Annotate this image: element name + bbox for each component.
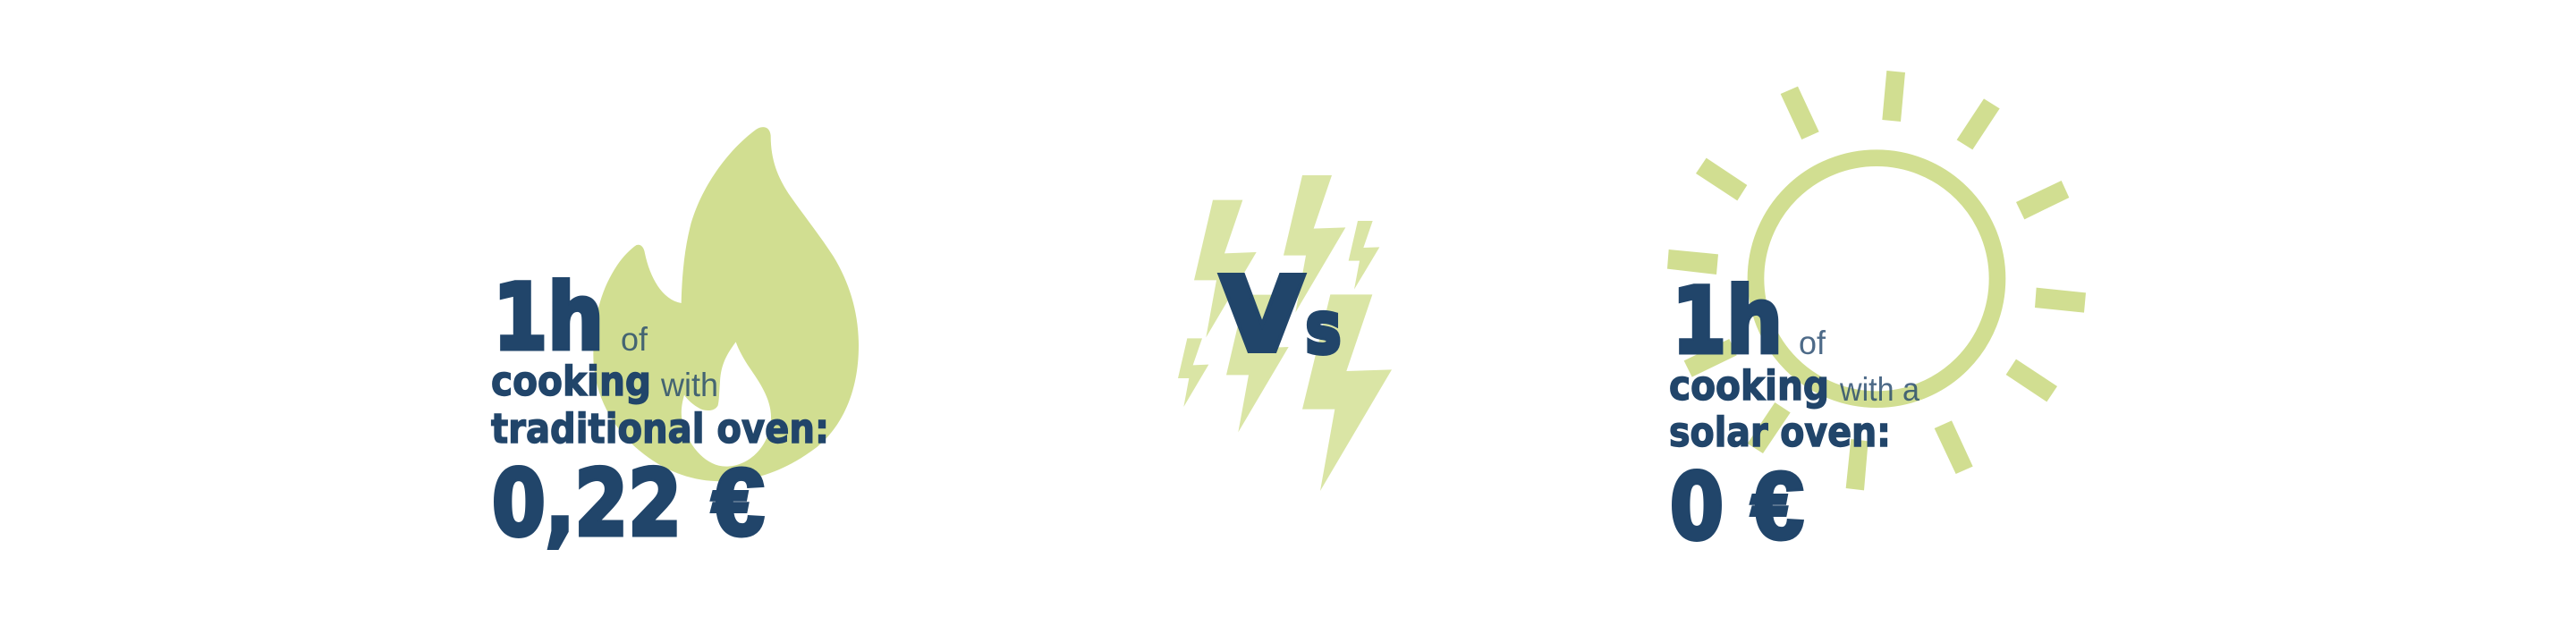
icon: sun — [1667, 71, 2086, 490]
number: price solar: € — [1751, 453, 1803, 559]
heading: 1h of: 1h — [1672, 268, 1783, 375]
heading: 1h of: of — [621, 321, 648, 358]
heading: 1h of: of — [1799, 325, 1826, 361]
text: cooking with a: cooking — [1669, 362, 1829, 410]
text: solar oven: solar oven: — [1669, 409, 1891, 456]
text: cooking with: with — [660, 367, 718, 403]
heading: Vs: V — [1222, 258, 1302, 374]
panel: traditional oven — [491, 127, 859, 557]
panel: solar oven — [1667, 71, 2086, 561]
heading: Vs: s — [1306, 289, 1341, 369]
icon: flame — [593, 127, 859, 481]
text: cooking with a: with a — [1839, 371, 1919, 408]
text: traditional oven: traditional oven: — [491, 405, 829, 452]
text: cooking with: cooking — [491, 358, 651, 405]
number: price solar — [1670, 453, 1803, 561]
number: price traditional: 0,22 — [492, 451, 682, 557]
icon: lightning bolts — [1178, 175, 1392, 491]
heading: 1h of: 1h — [493, 265, 604, 371]
panel: versus — [1178, 175, 1392, 491]
number: price traditional: € — [712, 450, 764, 555]
number: price solar: 0 — [1670, 454, 1724, 561]
heading: Vs — [1222, 258, 1341, 374]
